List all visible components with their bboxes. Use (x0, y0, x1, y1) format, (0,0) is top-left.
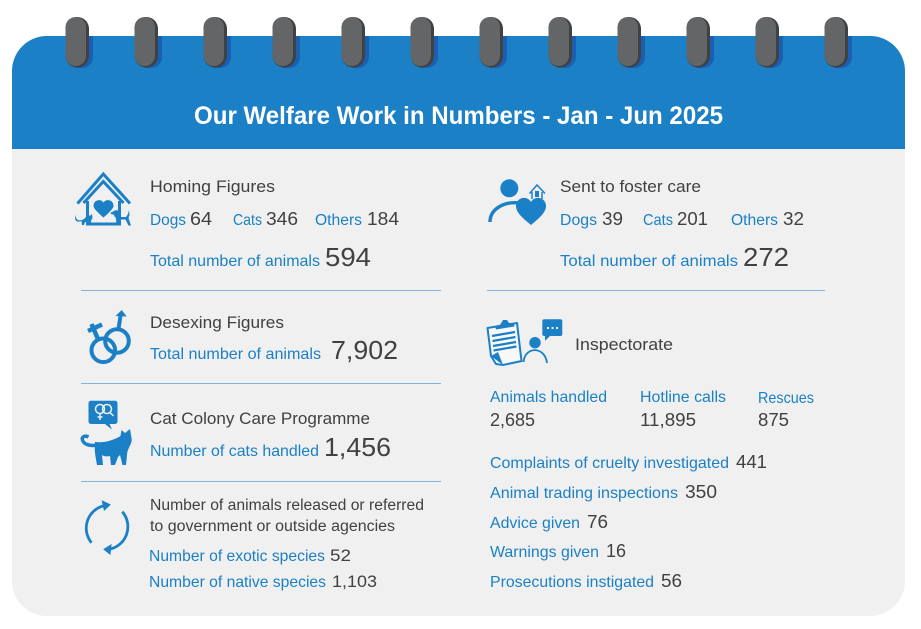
native species: 1,103 (332, 572, 377, 591)
dogs, cats, others: 64 (190, 209, 212, 229)
animals handled: Animals handled (490, 389, 607, 406)
heading: Cat Colony Care Programme (150, 410, 370, 428)
native species: Number of native species (149, 574, 326, 591)
icon: circular arrows (86, 501, 128, 554)
prosecutions: Prosecutions instigated (490, 574, 654, 591)
binder rings (66, 17, 852, 68)
heading: Number of animals released or referred (150, 497, 424, 514)
rescues: 875 (758, 410, 789, 430)
dogs, cats, others: 346 (266, 209, 298, 229)
total (560, 242, 789, 272)
hotline calls (640, 389, 726, 430)
dogs, cats, others: Others (731, 212, 778, 229)
icon: house with heart and pets (75, 174, 131, 226)
trading inspections: Animal trading inspections (490, 485, 678, 502)
total (150, 335, 398, 365)
panel: desexing figures (88, 310, 398, 365)
dogs, cats, others: Dogs (150, 212, 186, 229)
total: 7,902 (331, 335, 398, 365)
dogs, cats, others: Others (315, 212, 362, 229)
panel: released or referred (86, 497, 424, 591)
icon: gender rings (88, 310, 129, 362)
heading: Desexing Figures (150, 314, 284, 332)
panel: homing figures (75, 174, 399, 272)
dogs, cats, others: Dogs (560, 212, 597, 229)
icon: cat with speech bubble (82, 401, 132, 465)
dogs, cats, others: 39 (602, 209, 623, 229)
total: 272 (743, 242, 789, 272)
advice (490, 512, 608, 532)
hotline calls: 11,895 (640, 410, 696, 430)
total: Total number of animals (150, 346, 321, 363)
complaints: Complaints of cruelty investigated (490, 455, 729, 472)
dividers (81, 290, 825, 482)
warnings: Warnings given (490, 544, 599, 561)
animals handled: 2,685 (490, 410, 535, 430)
total: Total number of animals (150, 253, 320, 270)
heading: Sent to foster care (560, 178, 701, 196)
warnings: 16 (606, 541, 626, 561)
dogs, cats, others: Cats (233, 212, 262, 229)
panel: foster care (490, 178, 804, 272)
total: Total number of animals (560, 253, 738, 270)
exotic species: Number of exotic species (149, 548, 325, 565)
dogs, cats, others (560, 209, 804, 229)
heading: Homing Figures (150, 178, 275, 196)
trading inspections (490, 482, 717, 502)
warnings (490, 541, 626, 561)
advice: 76 (587, 512, 608, 532)
cats handled (150, 432, 391, 462)
dogs, cats, others: Cats (643, 212, 673, 229)
total (150, 242, 371, 272)
complaints: 441 (736, 452, 767, 472)
dogs, cats, others (150, 209, 399, 229)
title: Our Welfare Work in Numbers - Jan - Jun 2025 (194, 102, 723, 130)
rescues: Rescues (758, 390, 814, 407)
rescues (758, 390, 814, 430)
icon: person with heart and house (490, 179, 546, 225)
icon: clipboard, person and speech bubble (488, 319, 562, 365)
dogs, cats, others: 184 (367, 209, 399, 229)
exotic species: 52 (330, 546, 351, 565)
animals handled (490, 389, 607, 430)
heading: to government or outside agencies (150, 518, 395, 535)
dogs, cats, others: 201 (677, 209, 708, 229)
total: 594 (325, 242, 371, 272)
advice: Advice given (490, 515, 580, 532)
heading: Inspectorate (575, 336, 673, 354)
hotline calls: Hotline calls (640, 389, 726, 406)
cats handled: 1,456 (324, 432, 391, 462)
panel: cat colony care (82, 401, 391, 465)
heading (150, 497, 424, 535)
trading inspections: 350 (685, 482, 717, 502)
panel: inspectorate (488, 319, 814, 591)
prosecutions: 56 (661, 571, 682, 591)
dogs, cats, others: 32 (783, 209, 804, 229)
cats handled: Number of cats handled (150, 443, 319, 460)
